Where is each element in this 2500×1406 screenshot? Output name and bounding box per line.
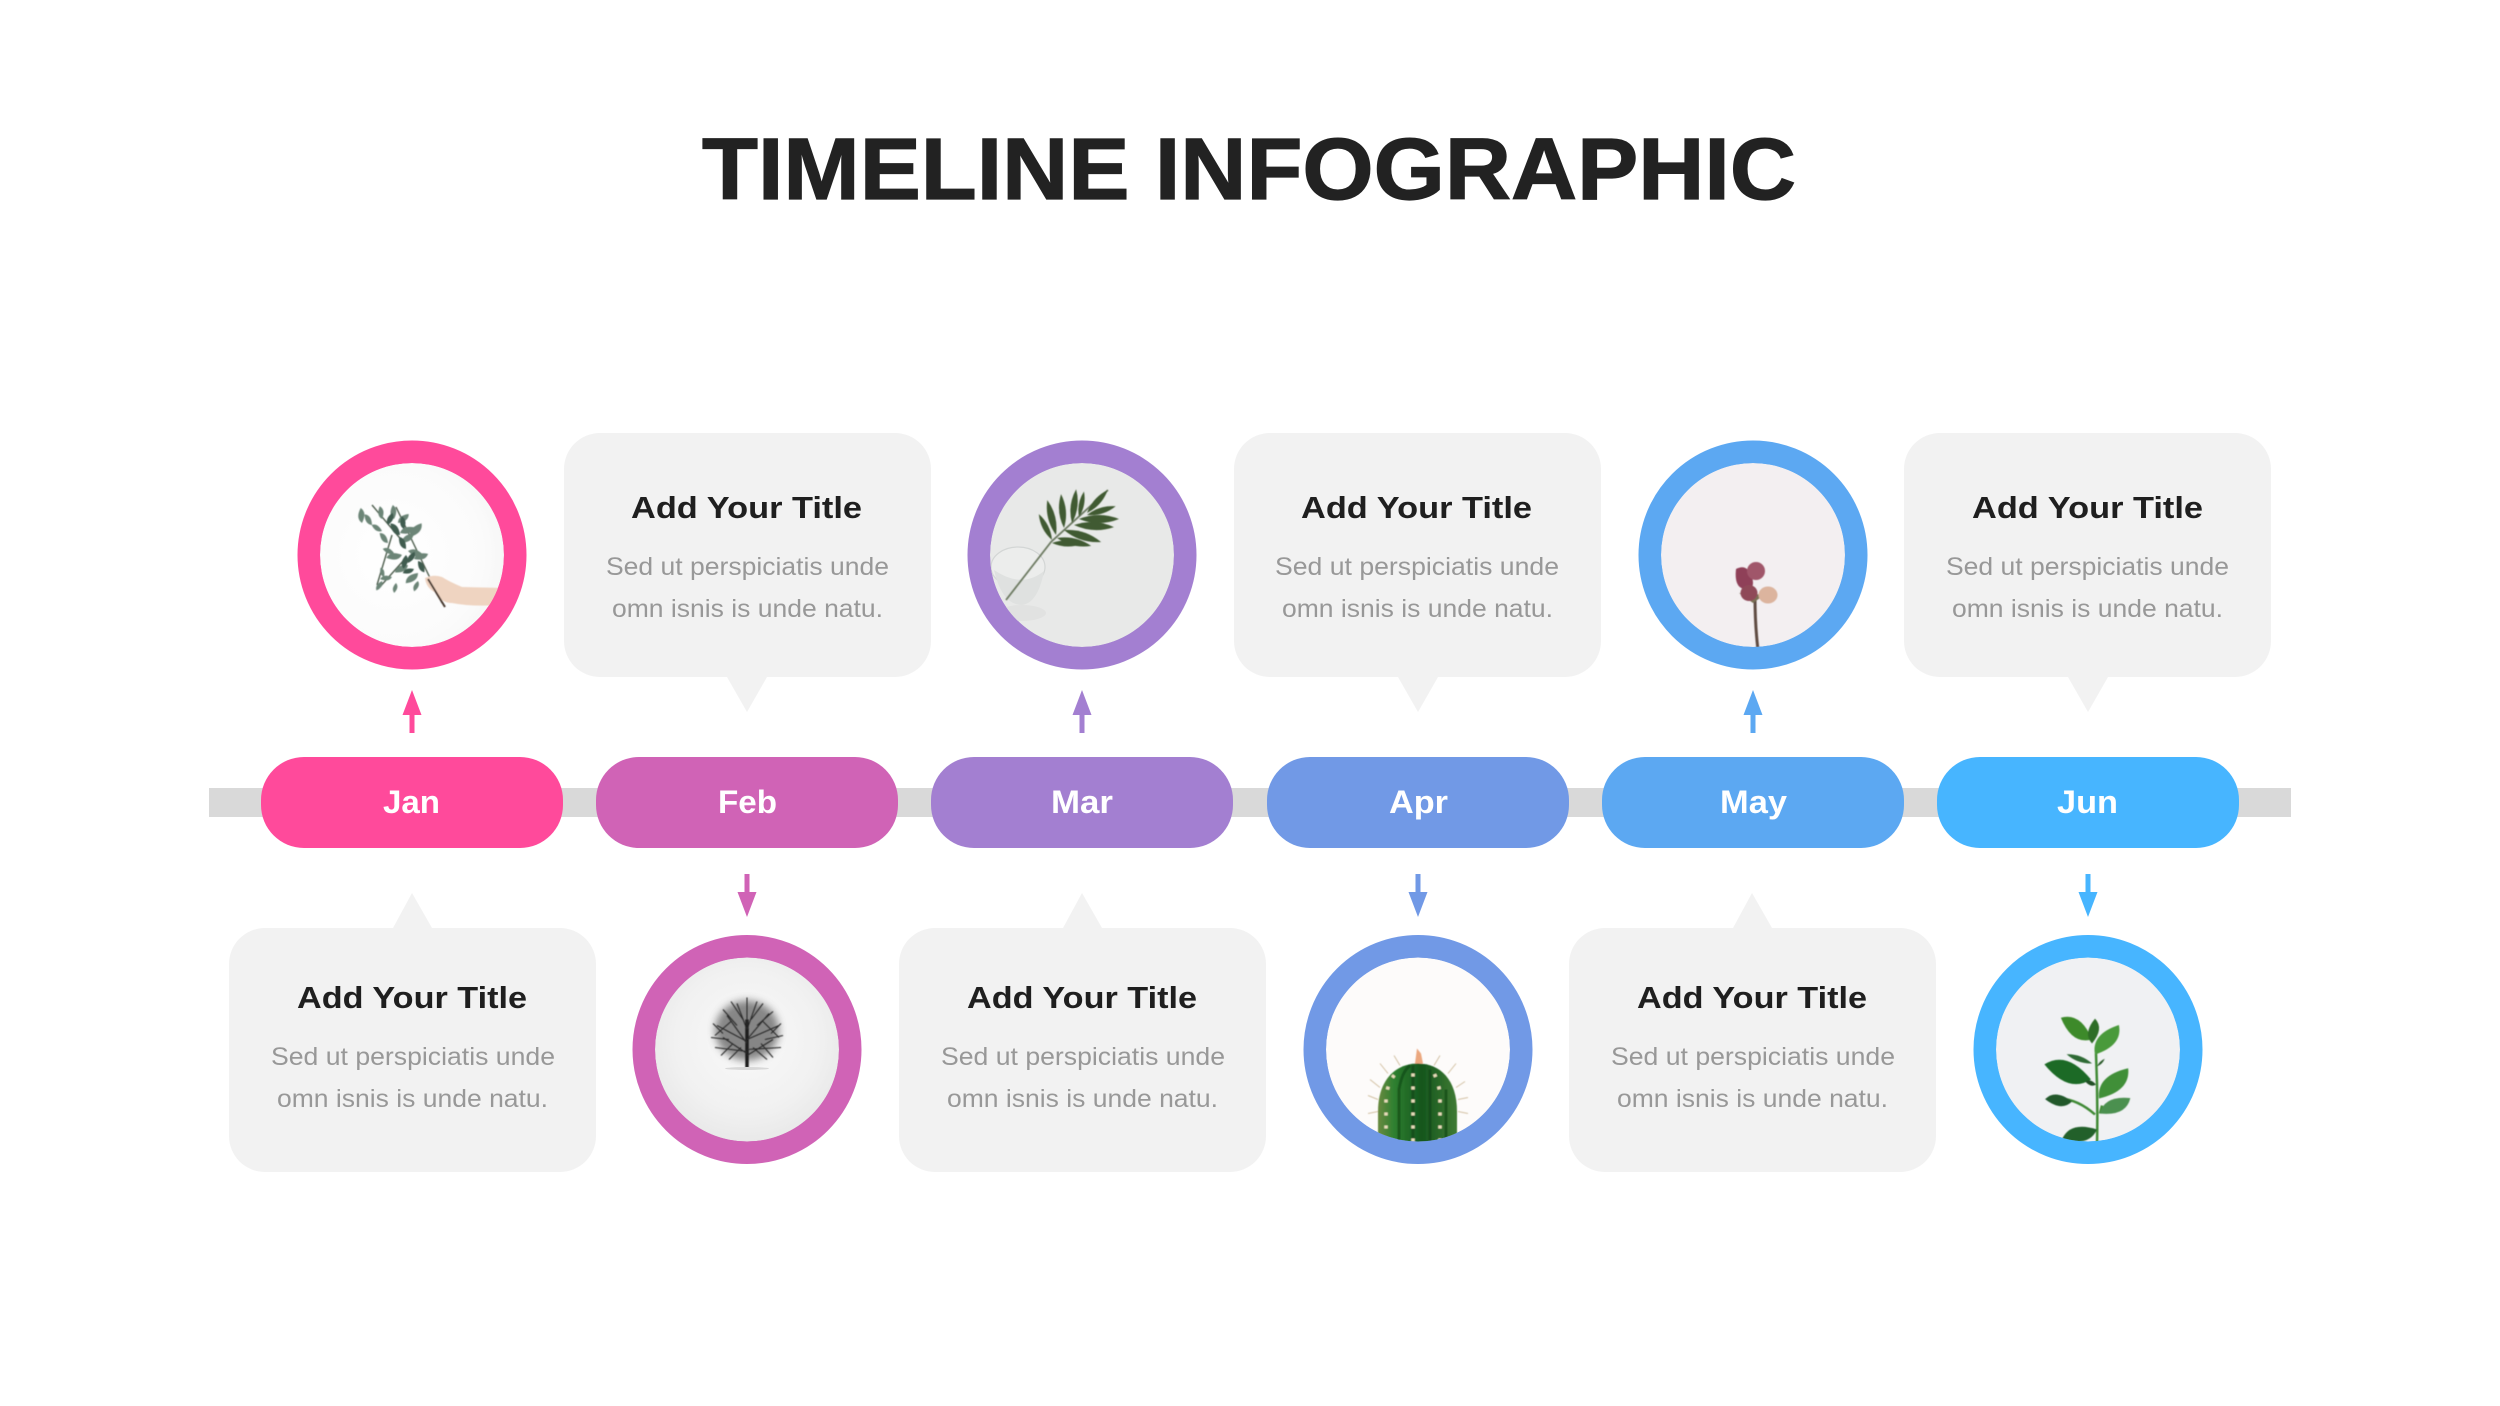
month pill: Apr: Apr — [1389, 784, 1448, 820]
month pill: Jan — [261, 757, 563, 848]
month pill: Mar: Mar — [1051, 784, 1113, 820]
text card: Apr — [1234, 433, 1601, 712]
text card: Mar: omn isnis is unde natu. — [947, 1085, 1218, 1113]
panel: February column — [564, 433, 931, 1152]
text card: Apr: Add Your Title — [1301, 490, 1532, 525]
month pill: Jan: Jan — [383, 784, 440, 820]
arrow up: Jan — [402, 690, 422, 733]
text card: Jun: Add Your Title — [1972, 490, 2203, 525]
text card: Feb: omn isnis is unde natu. — [612, 595, 883, 623]
timeline track — [209, 788, 2291, 817]
text card: Apr: omn isnis is unde natu. — [1282, 595, 1553, 623]
text card: Feb — [564, 433, 931, 712]
month pill: Feb — [596, 757, 898, 848]
month pill: Mar — [931, 757, 1233, 848]
title: TIMELINE INFOGRAPHIC — [702, 121, 1796, 218]
arrow up: May — [1744, 690, 1762, 733]
arrow down: Feb — [738, 874, 756, 917]
panel: March column — [899, 452, 1266, 1172]
text card: Apr: Sed ut perspiciatis unde — [1275, 553, 1559, 581]
arrow down: Apr — [1408, 874, 1428, 917]
text card: Mar — [899, 893, 1266, 1172]
panel: June column — [1904, 433, 2271, 1152]
text card: Jun: Sed ut perspiciatis unde — [1946, 553, 2229, 581]
month pill: Jun — [1937, 757, 2239, 848]
month pill: Jun: Jun — [2057, 784, 2118, 820]
text card: May — [1569, 893, 1936, 1172]
text card: Jun: omn isnis is unde natu. — [1952, 595, 2223, 623]
photo: cactus — [1315, 946, 1521, 1152]
photo: hand holding eucalyptus — [309, 452, 515, 658]
text card: Jun — [1904, 433, 2271, 712]
panel: April column — [1234, 433, 1601, 1152]
photo: dried flower — [1650, 452, 1856, 658]
text card: Feb: Sed ut perspiciatis unde — [606, 553, 889, 581]
text card: Jan: omn isnis is unde natu. — [277, 1085, 548, 1113]
arrow down: Jun — [2078, 874, 2098, 917]
photo: palm frond in glass — [979, 452, 1185, 658]
arrow up: Mar — [1072, 690, 1092, 733]
text card: May: Add Your Title — [1637, 980, 1867, 1015]
text card: Mar: Sed ut perspiciatis unde — [941, 1043, 1225, 1071]
month pill: May — [1602, 757, 1904, 848]
month pill: Apr — [1267, 757, 1569, 848]
month pill: May: May — [1720, 784, 1787, 820]
month pill: Feb: Feb — [718, 784, 777, 820]
photo: green plant — [1985, 946, 2191, 1152]
text card: Jan: Add Your Title — [297, 980, 527, 1015]
text card: May: omn isnis is unde natu. — [1617, 1085, 1888, 1113]
text card: Jan — [229, 893, 596, 1172]
photo: lone winter tree — [644, 946, 850, 1152]
text card: Mar: Add Your Title — [967, 980, 1197, 1015]
text card: Feb: Add Your Title — [631, 490, 862, 525]
panel: January column — [229, 452, 596, 1172]
text card: May: Sed ut perspiciatis unde — [1611, 1043, 1895, 1071]
text card: Jan: Sed ut perspiciatis unde — [271, 1043, 555, 1071]
panel: May column — [1569, 452, 1936, 1172]
